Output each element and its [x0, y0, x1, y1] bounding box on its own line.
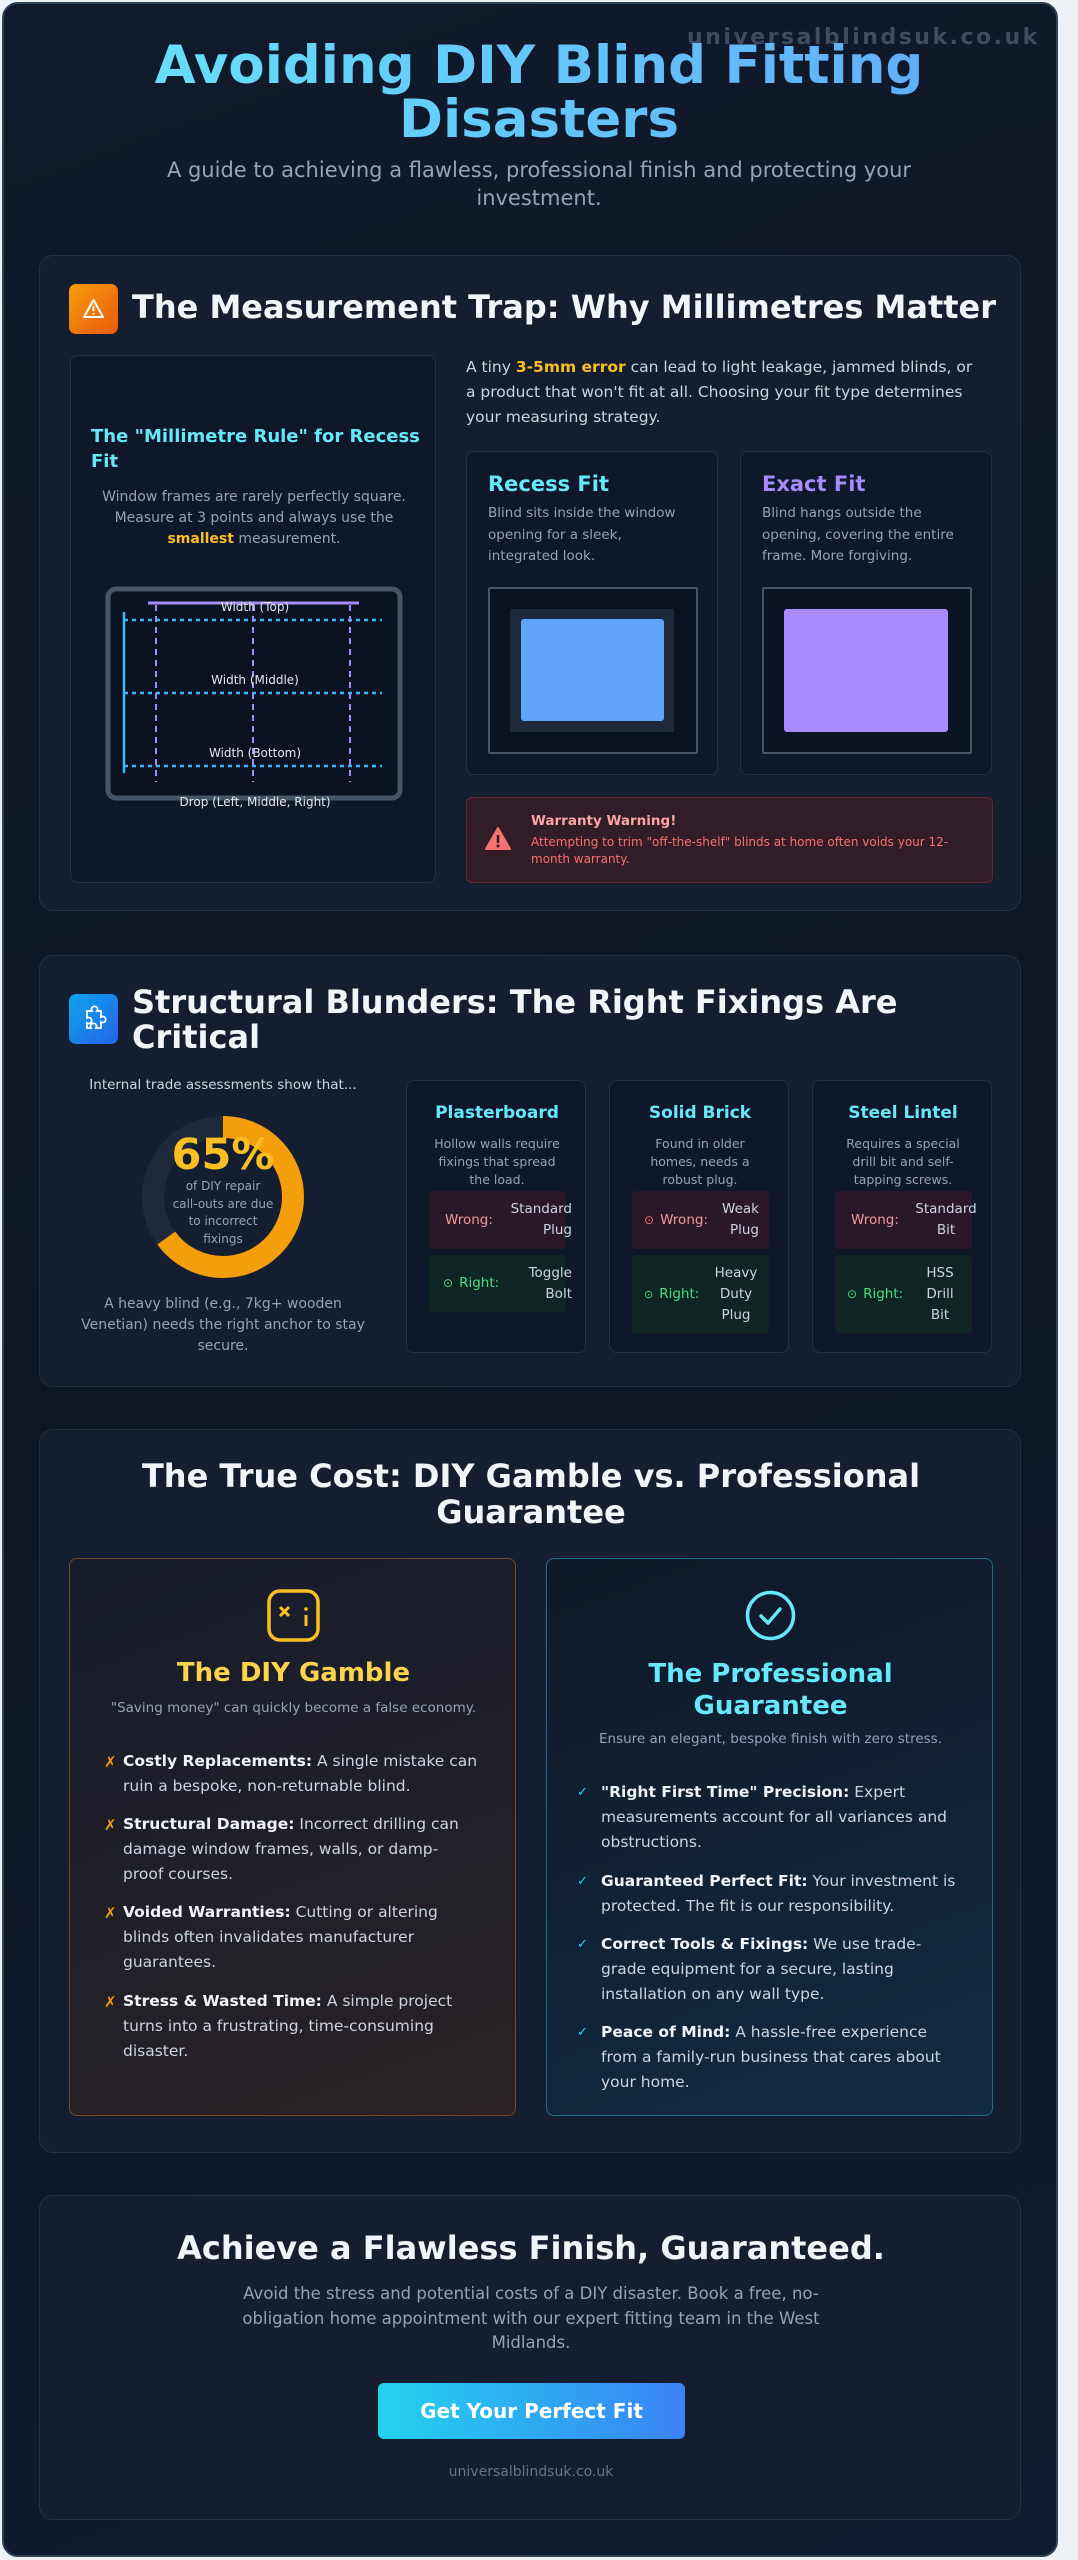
card: solid brick: Weak: [722, 1201, 759, 1217]
heading: [142, 1457, 920, 1531]
card: solid brick: Plug: [730, 1222, 759, 1238]
callout: warranty warning: [466, 797, 993, 883]
card: plasterboard: Toggle: [529, 1264, 572, 1280]
list: DIY risks: Structural Damage: Incorrect drilling can: [123, 1815, 459, 1833]
list: professional benefits: ✓: [577, 1937, 588, 1952]
card: solid brick: Solid Brick: [649, 1103, 751, 1123]
subheading: [91, 426, 420, 472]
card: exact fit: opening, covering the entire: [762, 526, 954, 542]
watermark: universalblindsuk.co.uk: [687, 25, 1040, 50]
list: professional benefits: your home.: [601, 2073, 690, 2091]
diagram: measurement points: Drop (Left, Middle, Right): [179, 795, 331, 809]
chart: 65% donut: 65%: [172, 1130, 274, 1180]
cta text: [242, 2284, 820, 2352]
button: [378, 2383, 685, 2439]
list: DIY risks: disaster.: [123, 2042, 188, 2060]
card: steel lintel: Drill: [926, 1286, 954, 1302]
card: exact fit: Blind hangs outside the: [762, 505, 922, 521]
card: plasterboard: ⊙: [443, 1276, 453, 1290]
title: Avoiding DIY Blind Fitting: [155, 35, 923, 96]
card: steel lintel: [812, 1080, 992, 1353]
card: plasterboard: Hollow walls require: [434, 1136, 560, 1151]
list: professional benefits: grade equipment for a secure, lasting: [601, 1960, 894, 1978]
card: recess fit: opening for a sleek,: [488, 526, 622, 542]
card: steel lintel: Steel Lintel: [848, 1103, 958, 1123]
card: exact fit: frame. More forgiving.: [762, 548, 912, 564]
card: solid brick: ⊙: [644, 1288, 653, 1301]
card: professional guarantee: Ensure an elegant, bespoke finish with zero stress.: [599, 1731, 942, 1747]
card: solid brick: homes, needs a: [650, 1154, 750, 1169]
heading: Critical: [132, 1018, 260, 1056]
icon: puzzle: [69, 994, 118, 1044]
card: plasterboard: Standard: [511, 1201, 572, 1217]
card: recess fit: [466, 451, 718, 775]
stat note: secure.: [198, 1338, 248, 1354]
subtitle: [167, 158, 911, 210]
list: professional benefits: ✓: [577, 1874, 588, 1889]
heading: The Measurement Trap: Why Millimetres Matter: [132, 288, 996, 326]
card: professional guarantee: Guarantee: [694, 1691, 847, 1721]
heading: Achieve a Flawless Finish, Guaranteed.: [177, 2229, 885, 2267]
card: steel lintel: ⊙: [847, 1287, 857, 1301]
chart: 65% donut: [142, 1116, 304, 1278]
heading: Guarantee: [436, 1493, 626, 1531]
card: solid brick: Plug: [721, 1307, 751, 1323]
card: plasterboard: Right:: [459, 1275, 499, 1291]
diagram: measurement points: [106, 586, 402, 809]
card: DIY gamble: [69, 1558, 516, 2116]
card: DIY gamble: The DIY Gamble: [177, 1658, 410, 1688]
panel: measurement trap: [39, 255, 1021, 911]
list: DIY risks: proof courses.: [123, 1865, 233, 1883]
cta text: Avoid the stress and potential costs of a DIY disaster. Book a free, no-: [243, 2284, 819, 2303]
list: DIY risks: ✗: [104, 1993, 117, 2011]
list: DIY risks: Costly Replacements: A single mistake can: [123, 1752, 477, 1770]
card: steel lintel: Standard: [915, 1201, 977, 1217]
card: steel lintel: Bit: [937, 1222, 955, 1238]
stat note: Venetian) needs the right anchor to stay: [81, 1317, 365, 1333]
card: solid brick: ⊙: [644, 1212, 654, 1226]
list: professional benefits: obstructions.: [601, 1833, 702, 1851]
card: plasterboard: fixings that spread: [438, 1154, 556, 1169]
heading: Structural Blunders: The Right Fixings Are: [132, 983, 897, 1021]
chart: 65% donut: fixings: [203, 1232, 243, 1246]
chart: 65% donut: of DIY repair: [186, 1179, 260, 1193]
icon: check circle: [746, 1590, 796, 1640]
card: plasterboard: [406, 1080, 586, 1353]
card: exact fit: [740, 451, 992, 775]
list: professional benefits: Guaranteed Perfect Fit: Your investment is: [601, 1872, 955, 1890]
intro text: a product that won't fit at all. Choosing your fit type determines: [466, 383, 962, 401]
list: DIY risks: ✗: [104, 1753, 117, 1771]
card: solid brick: Duty: [720, 1286, 752, 1302]
heading: The True Cost: DIY Gamble vs. Professional: [142, 1457, 920, 1495]
chart: 65% donut: to incorrect: [189, 1214, 257, 1228]
list: professional benefits: "Right First Time" Precision: Expert: [601, 1783, 905, 1801]
card: solid brick: Wrong:: [660, 1212, 708, 1228]
list: professional benefits: Peace of Mind: A hassle-free experience: [601, 2023, 927, 2041]
card: plasterboard: Bolt: [545, 1286, 572, 1302]
callout: warranty warning: Warranty Warning!: [531, 813, 676, 829]
subtitle: investment.: [476, 186, 602, 210]
card: solid brick: robust plug.: [662, 1172, 738, 1187]
subheading: The "Millimetre Rule" for Recess: [91, 426, 420, 447]
card: exact fit: Exact Fit: [762, 472, 865, 496]
list: DIY risks: [104, 1752, 477, 2060]
left subcard: millimetre rule: [70, 355, 436, 883]
list: professional benefits: [577, 1783, 955, 2091]
list: DIY risks: ✗: [104, 1904, 117, 1922]
card: DIY gamble: "Saving money" can quickly become a false economy.: [111, 1700, 476, 1716]
list: DIY risks: Stress & Wasted Time: A simple project: [123, 1992, 452, 2010]
list: professional benefits: installation on any wall type.: [601, 1985, 824, 2003]
list: DIY risks: ✗: [104, 1816, 117, 1834]
list: DIY risks: blinds often invalidates manufacturer: [123, 1928, 414, 1946]
card: solid brick: Heavy: [715, 1265, 757, 1281]
card: steel lintel: drill bit and self-: [852, 1154, 954, 1169]
stat note: A heavy blind (e.g., 7kg+ wooden: [104, 1296, 342, 1312]
intro text: A tiny 3-5mm error can lead to light leakage, jammed blinds, or: [466, 358, 972, 376]
cta text: Midlands.: [492, 2333, 570, 2352]
list: professional benefits: Correct Tools & Fixings: We use trade-: [601, 1935, 921, 1953]
card: solid brick: [609, 1080, 789, 1353]
card: professional guarantee: The Professional: [648, 1659, 893, 1689]
heading: [132, 983, 897, 1056]
diagram: measurement points: Width (Top): [221, 600, 289, 614]
chart: 65% donut: call-outs are due: [173, 1196, 273, 1210]
rule text: Measure at 3 points and always use the: [115, 510, 393, 526]
stat note: [81, 1296, 365, 1354]
card: steel lintel: tapping screws.: [854, 1172, 952, 1187]
panel: call to action: [39, 2195, 1021, 2520]
icon: recess blind: [488, 587, 698, 754]
card: solid brick: Right:: [659, 1286, 699, 1302]
card: steel lintel: Right:: [863, 1286, 903, 1302]
card: recess fit: Recess Fit: [488, 472, 609, 496]
icon: exact blind: [762, 587, 972, 754]
list: DIY risks: Voided Warranties: Cutting or altering: [123, 1903, 438, 1921]
list: DIY risks: ruin a bespoke, non-returnable blind.: [123, 1777, 411, 1795]
url: universalblindsuk.co.uk: [449, 2464, 613, 2480]
card: steel lintel: Requires a special: [846, 1136, 960, 1151]
subtitle: A guide to achieving a flawless, professional finish and protecting your: [167, 158, 911, 182]
list: professional benefits: ✓: [577, 2025, 588, 2040]
title: Disasters: [399, 89, 679, 150]
list: professional benefits: from a family-run business that cares about: [601, 2048, 941, 2066]
panel: structural blunders: [39, 955, 1021, 1387]
list: DIY risks: turns into a frustrating, time-consuming: [123, 2017, 434, 2035]
title: [0, 39, 1078, 147]
intro text: [466, 358, 972, 426]
subheading: Fit: [91, 451, 118, 472]
list: DIY risks: guarantees.: [123, 1953, 216, 1971]
stat intro: Internal trade assessments show that...: [89, 1077, 357, 1093]
card: steel lintel: Bit: [931, 1307, 949, 1323]
card: steel lintel: HSS: [926, 1265, 954, 1281]
diagram: measurement points: Width (Bottom): [209, 746, 301, 760]
card: plasterboard: Plasterboard: [435, 1103, 559, 1123]
rule text: [102, 489, 406, 547]
card: recess fit: integrated look.: [488, 548, 595, 564]
card: solid brick: Found in older: [655, 1136, 745, 1151]
card: steel lintel: Wrong:: [851, 1212, 899, 1228]
card: plasterboard: the load.: [469, 1172, 525, 1187]
list: professional benefits: ✓: [577, 1785, 588, 1800]
icon: dizzy face: [267, 1589, 320, 1642]
list: professional benefits: protected. The fit is our responsibility.: [601, 1897, 894, 1915]
panel: true cost: [39, 1429, 1021, 2153]
list: professional benefits: measurements account for all variances and: [601, 1808, 947, 1826]
rule text: smallest measurement.: [167, 531, 341, 547]
card: professional guarantee: [546, 1558, 993, 2116]
rule text: Window frames are rarely perfectly square.: [102, 489, 406, 505]
diagram: measurement points: Width (Middle): [211, 673, 299, 687]
card: recess fit: Blind sits inside the window: [488, 505, 676, 521]
icon: warning: [69, 284, 118, 334]
button: Get Your Perfect Fit: [420, 2399, 643, 2423]
card: plasterboard: Wrong:: [445, 1212, 493, 1228]
callout: warranty warning: month warranty.: [531, 852, 629, 866]
card: plasterboard: Plug: [543, 1222, 572, 1238]
intro text: your measuring strategy.: [466, 408, 660, 426]
cta text: obligation home appointment with our expert fitting team in the West: [242, 2308, 820, 2328]
callout: warranty warning: Attempting to trim "off-the-shelf" blinds at home often voids your 12-: [531, 835, 948, 849]
list: DIY risks: damage window frames, walls, or damp-: [123, 1840, 438, 1858]
